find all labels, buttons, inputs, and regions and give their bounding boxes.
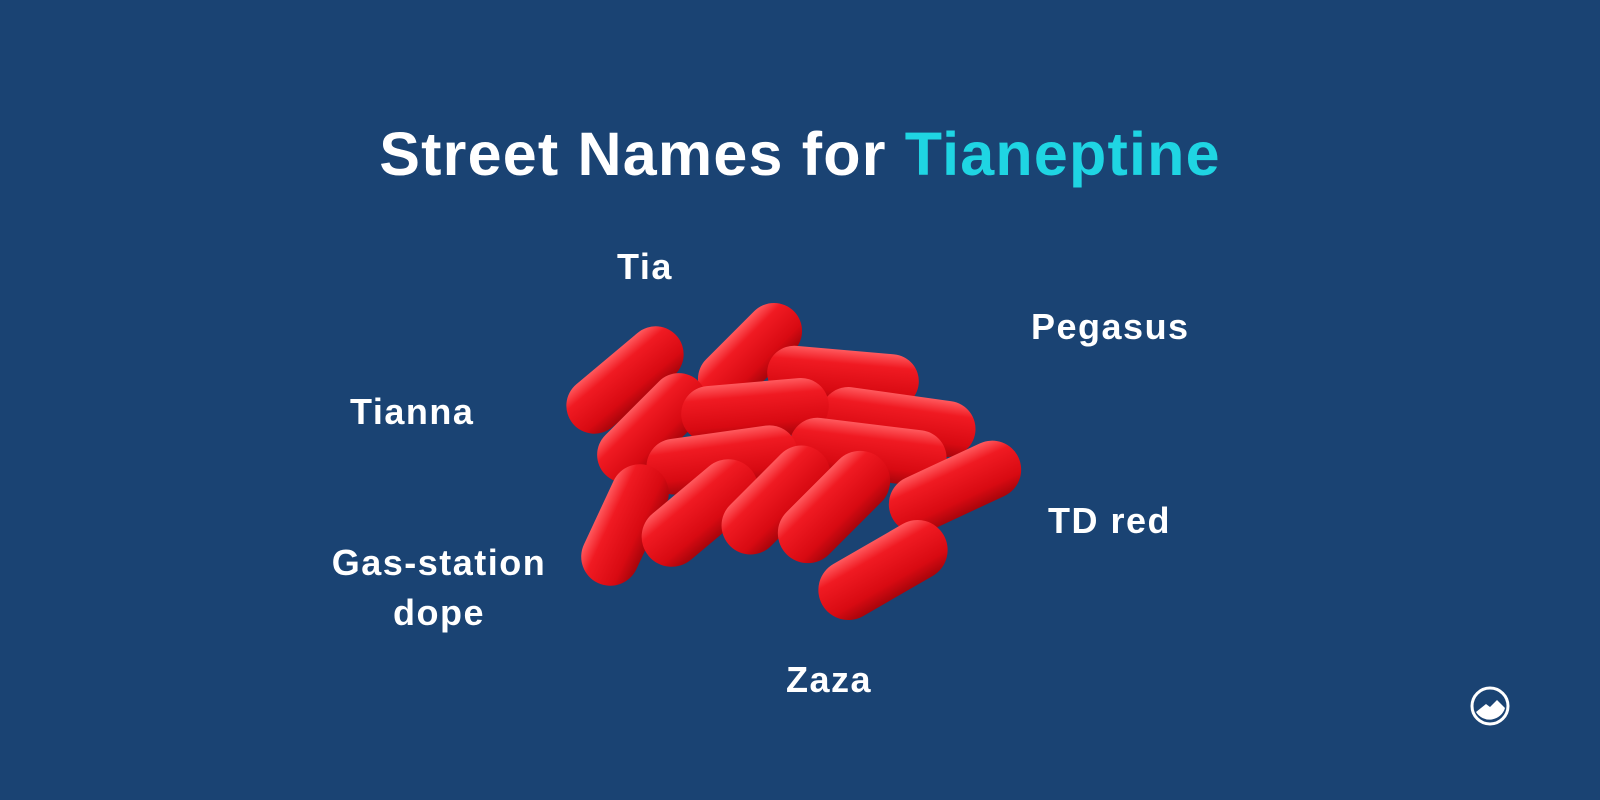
label: TD red: TD red: [1048, 500, 1171, 541]
label: Gas-station dope: [332, 542, 546, 633]
title: Street Names for Tianeptine: [379, 120, 1221, 188]
label: Gas-station dope: dope: [393, 592, 485, 633]
label: Zaza: Zaza: [786, 659, 872, 700]
label: Tianna: Tianna: [350, 391, 474, 432]
label: Tia: Tia: [617, 246, 673, 287]
label: Pegasus: Pegasus: [1031, 306, 1190, 347]
label: Gas-station dope: Gas-station: [332, 542, 546, 583]
icon: logo: [1470, 686, 1510, 726]
